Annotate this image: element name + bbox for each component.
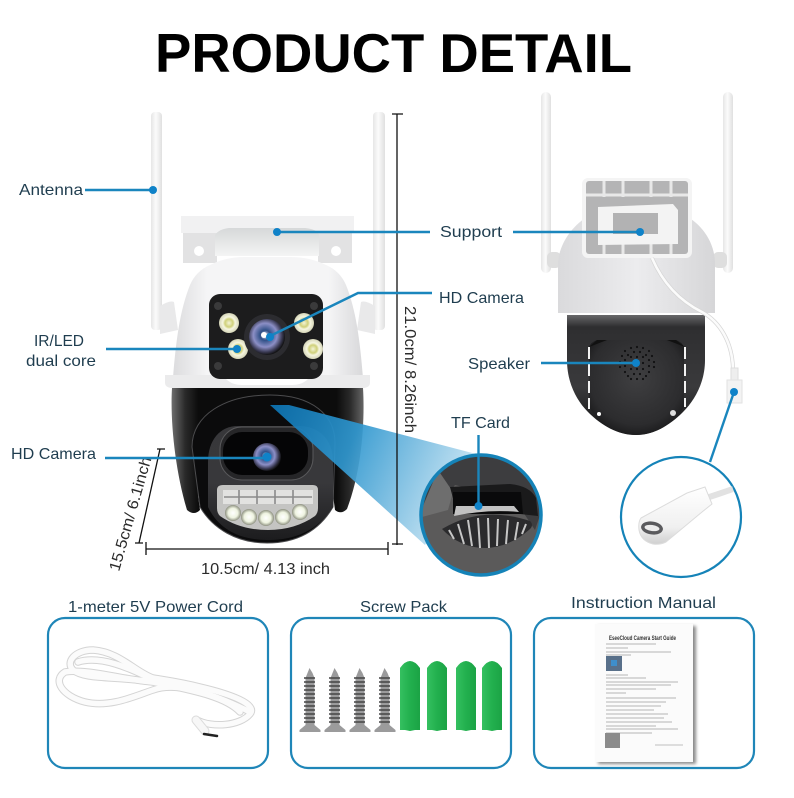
- label: Speaker: Speaker: [468, 356, 531, 373]
- label: Support: [273, 224, 644, 241]
- dimension: depth: 15.5cm/ 6.1inch: [107, 455, 155, 573]
- label: Antenna: [19, 182, 157, 199]
- rotating head: [192, 395, 335, 543]
- heading: Screw Pack: [360, 599, 448, 616]
- dimension: width: 10.5cm/ 4.13 inch: [201, 561, 330, 578]
- connector detail circle: [621, 457, 741, 577]
- back camera: [541, 92, 742, 435]
- icon: coiled cable: [59, 650, 251, 736]
- speaker grille: [619, 346, 655, 380]
- label: IR/LED dual core: [26, 333, 241, 370]
- label: Antenna: Antenna: [19, 182, 83, 199]
- label: TF Card: TF Card: [451, 415, 510, 432]
- manual sheet: [595, 624, 696, 764]
- panel: screw pack: [291, 599, 511, 768]
- rear mount plate: [582, 178, 692, 258]
- plug: [731, 368, 738, 380]
- label: HD Camera lower: [11, 446, 272, 463]
- heading: 1-meter 5V Power Cord: [68, 599, 243, 616]
- label: HD Camera upper: [266, 290, 524, 341]
- connector callout: [710, 388, 738, 462]
- manual sheet: EseeCloud Camera Start Guide: [609, 636, 676, 642]
- dimension lines: [135, 114, 403, 555]
- rear white housing: [558, 214, 715, 313]
- beam to TF card: [270, 405, 480, 545]
- title: PRODUCT DETAIL: [155, 22, 632, 84]
- green wall plugs: [400, 661, 502, 731]
- panel: power cord: [48, 599, 268, 768]
- label: HD Camera upper: HD Camera: [439, 290, 524, 307]
- TF card detail circle: [419, 453, 543, 577]
- LED strip: [217, 485, 318, 530]
- mounting bracket: [181, 216, 354, 263]
- rear inner head: [589, 340, 685, 435]
- label: HD Camera lower: HD Camera: [11, 446, 96, 463]
- white upper housing: [173, 257, 363, 385]
- label: TF Card: [451, 415, 510, 510]
- panel: instruction manual: [534, 595, 754, 768]
- screws: [300, 668, 396, 732]
- heading: Instruction Manual: [571, 595, 716, 612]
- lower camera window: [220, 427, 313, 480]
- power cable: [652, 258, 733, 368]
- label: IR/LED dual core: dual core: [26, 353, 96, 370]
- upper camera face: [209, 294, 323, 385]
- icon: front antennas: [151, 112, 385, 334]
- label: IR/LED dual core: IR/LED: [34, 333, 84, 350]
- white base band: [165, 375, 370, 388]
- icon: rear antennas: [541, 92, 733, 273]
- label: Speaker: [468, 356, 640, 373]
- front camera: [151, 112, 385, 543]
- dimension: height: 21.0cm/ 8.26inch: [401, 306, 418, 433]
- label: Support: Support: [440, 224, 503, 241]
- rear black dome: [567, 315, 705, 435]
- black lower housing: [172, 388, 364, 513]
